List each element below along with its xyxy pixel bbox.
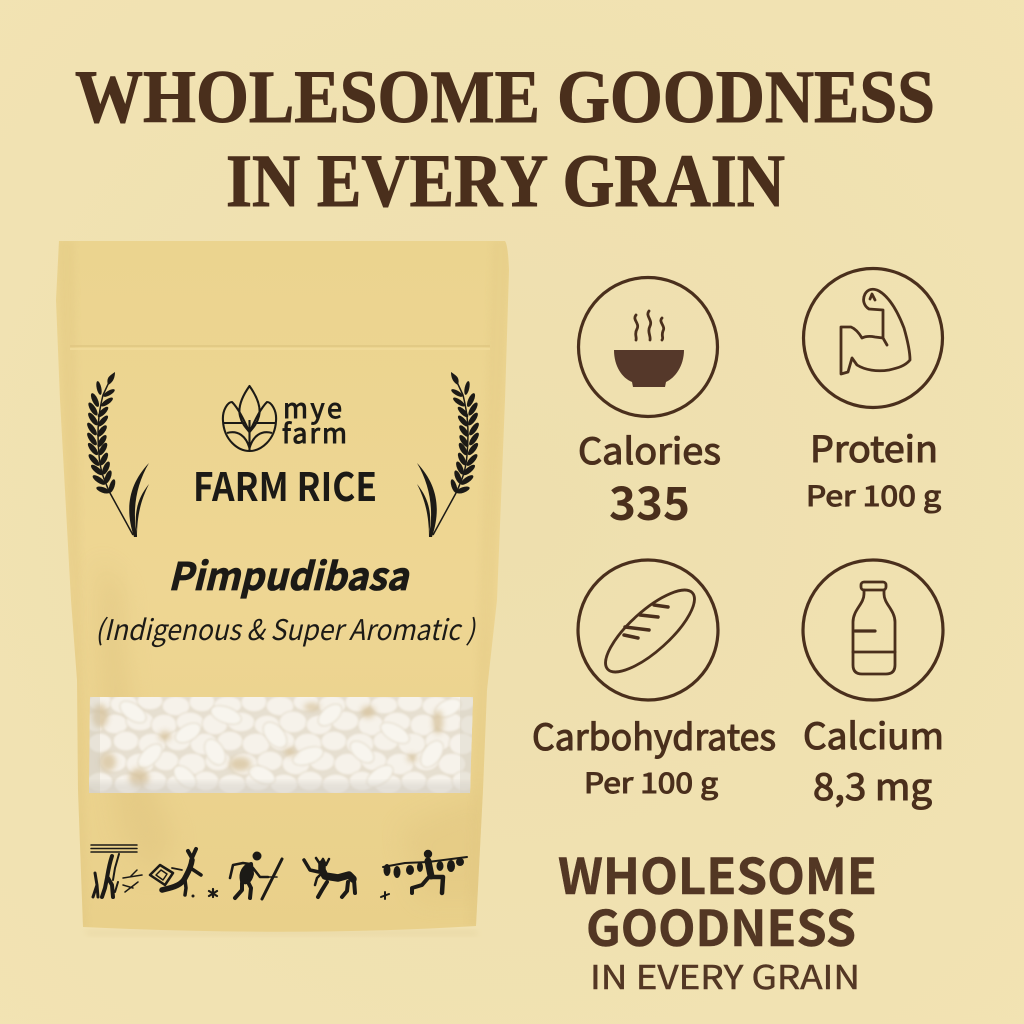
panel: protein [804,268,942,515]
figure: person lifting beams [91,845,142,897]
icon: steaming bowl [578,278,718,416]
icon: flexed arm [804,268,942,408]
carbohydrates unit: Per 100 g [584,762,718,802]
icon: bread loaf [578,560,718,700]
protein label: Protein [810,421,938,473]
panel: product pouch [56,241,510,936]
logo wordmark: mye [283,387,342,426]
calcium label: Calcium [803,708,944,760]
figure: walking man with staff [230,852,282,899]
calories label: Calories [578,423,721,475]
pouch shadow [84,930,478,936]
title: WHOLESOME GOODNESS [75,56,935,139]
closing slogan: IN EVERY GRAIN [590,951,860,999]
figure: runner carrying pole with bundles [381,850,467,899]
logo wordmark: farm [282,412,347,451]
title [75,56,935,223]
calcium value: 8,3 mg [813,757,932,811]
closing slogan: WHOLESOME [558,838,877,909]
right wheat ear [417,372,481,537]
variety description: (Indigenous & Super Aromatic ) [95,608,476,649]
title: IN EVERY GRAIN [226,140,785,223]
carbohydrates label: Carbohydrates [532,709,776,761]
calories value: 335 [609,468,690,534]
heading: farm rice: FARM RICE [193,457,377,513]
panel: calcium [803,560,944,811]
pouch shading [58,241,510,927]
closing slogan: GOODNESS [586,890,856,961]
decorative folk figures [91,845,467,899]
left wheat ear [85,372,149,537]
figure: running man with basket [150,849,217,898]
closing slogan [558,838,877,999]
panel: carbohydrates [532,560,776,802]
icon: milk bottle [803,560,943,700]
protein unit: Per 100 g [806,475,941,515]
pouch body [56,241,509,932]
variety name: Pimpudibasa [168,546,410,601]
figure: horned animal [304,858,355,897]
panel: calories [578,278,721,534]
logo wordmark [282,387,347,451]
rice window [89,697,473,793]
icon: mye farm logo mark [223,386,276,451]
